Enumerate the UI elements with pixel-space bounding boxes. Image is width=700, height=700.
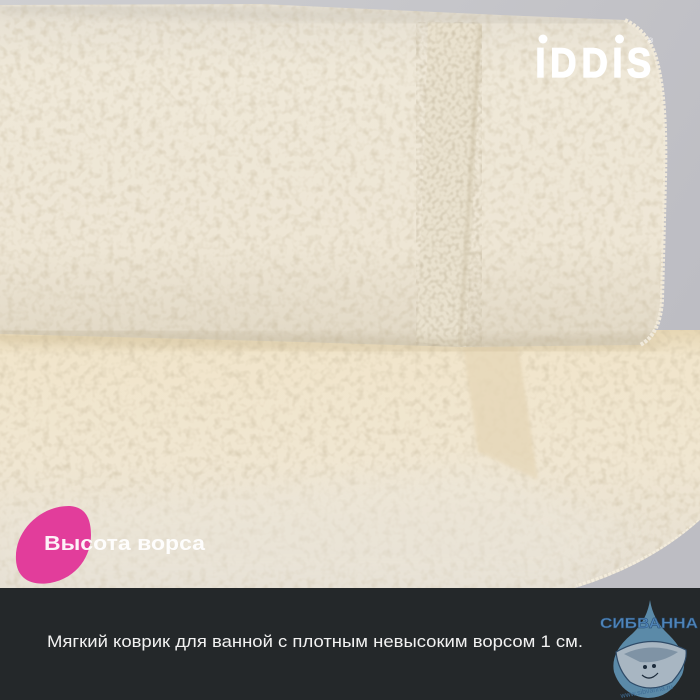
brand logo: IDDIS: IDDIS [535, 40, 651, 87]
pink blob badge [16, 506, 91, 584]
panel: lower bath mat layer [0, 330, 700, 590]
stitched mat edge [577, 522, 700, 587]
brand logo: IDDIS: ® [648, 37, 654, 45]
woven border band on lower mat [463, 345, 538, 480]
stitched rolled mat edge [625, 20, 665, 345]
watermark logo: Sibvanna [600, 600, 699, 700]
water drop [613, 600, 684, 698]
panel: upper rolled bath mat [0, 0, 700, 350]
smiling bathtub [616, 641, 686, 688]
badge label: Высота ворса [44, 532, 206, 555]
caption text: Мягкий коврик для ванной с плотным невысоким ворсом 1 см. [47, 632, 583, 651]
woven border band on rolled mat [416, 22, 482, 347]
bottom caption bar [0, 588, 700, 700]
logo wordmark: СИБВАННА [600, 616, 699, 632]
logo url: www.sibvanna.ru [619, 684, 674, 700]
